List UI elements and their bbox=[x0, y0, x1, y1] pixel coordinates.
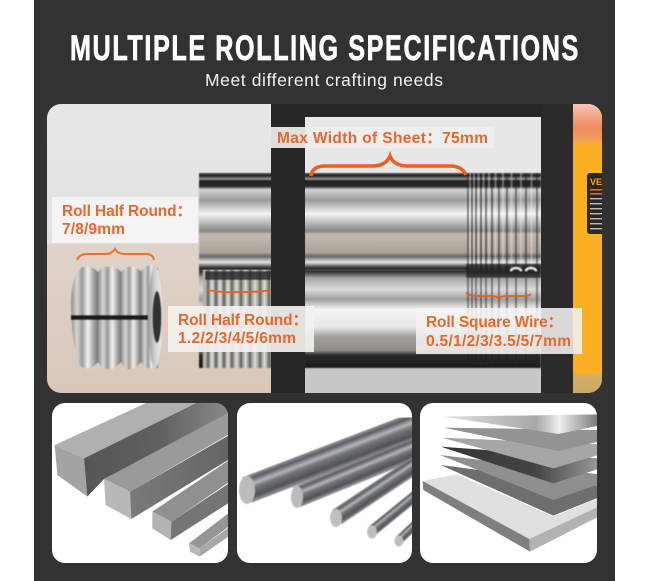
sheet 6 bbox=[441, 465, 598, 516]
top frame band bbox=[305, 104, 541, 117]
label box: max width: Max Width of Sheet：75mm bbox=[277, 130, 488, 147]
rod 3 bbox=[330, 462, 420, 527]
bar 1 bbox=[55, 402, 231, 497]
tile: square bars bbox=[52, 402, 231, 563]
tile: round rods bbox=[237, 403, 420, 563]
yellow machine body bbox=[573, 104, 602, 393]
main photo: rolling mill rollers bbox=[47, 104, 605, 393]
brace: sheet width bbox=[311, 156, 466, 176]
sheet 2 bbox=[443, 428, 598, 451]
backdrop behind rollers bbox=[305, 244, 541, 368]
rod 1 bbox=[239, 424, 420, 504]
top sheet bbox=[443, 414, 598, 434]
tile: stacked sheets bbox=[420, 403, 598, 563]
right frame post bbox=[541, 104, 573, 393]
label box: roll half round large bbox=[52, 197, 198, 243]
upper roller bbox=[199, 173, 541, 270]
rod 4 bbox=[366, 490, 412, 539]
brace: left thread bbox=[207, 290, 271, 292]
lower roller bbox=[199, 264, 541, 368]
small grooved roll bbox=[71, 265, 162, 369]
sheet 4 bbox=[441, 447, 598, 483]
label box: roll half round small bbox=[168, 306, 314, 352]
label box: roll half round small: Roll Half Round： bbox=[178, 312, 308, 329]
bar 3 bbox=[152, 459, 231, 540]
bar 4 bbox=[189, 514, 228, 556]
label box: roll half round large: Roll Half Round： bbox=[62, 203, 192, 220]
brace: small roll bbox=[77, 249, 154, 260]
machine spec label: VE bbox=[590, 177, 602, 187]
title: MULTIPLE ROLLING SPECIFICATIONS bbox=[70, 29, 578, 68]
label box: roll square wire: 0.5/1/2/3/3.5/5/7mm bbox=[426, 333, 571, 350]
rod 5 bbox=[394, 520, 412, 547]
label box: roll square wire bbox=[416, 308, 582, 354]
rod 2 bbox=[291, 447, 420, 508]
subtitle: Meet different crafting needs bbox=[205, 70, 443, 90]
sheet 3 bbox=[442, 438, 598, 468]
left frame post bbox=[271, 104, 305, 393]
brace: right thread bbox=[466, 293, 531, 299]
machine spec label bbox=[587, 173, 602, 234]
label box: roll square wire: Roll Square Wire： bbox=[426, 314, 563, 331]
bottom slab bbox=[423, 474, 598, 552]
sheet 5 bbox=[440, 455, 598, 500]
label box: roll half round small: 1.2/2/3/4/5/6mm bbox=[178, 330, 296, 347]
label box: roll half round large: 7/8/9mm bbox=[62, 221, 125, 238]
bar 2 bbox=[104, 412, 231, 519]
